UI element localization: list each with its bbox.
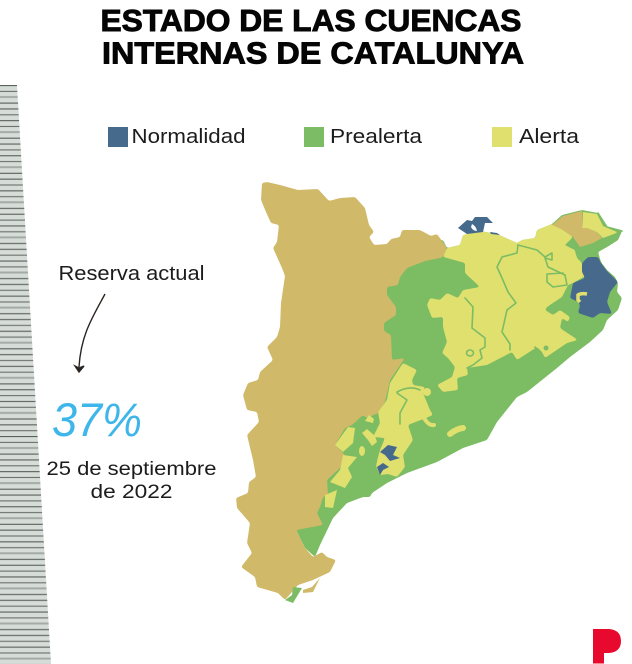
date	[46, 458, 216, 503]
big number 37%: 37%	[52, 393, 142, 446]
date: de 2022	[90, 481, 172, 503]
region: NE tan	[552, 211, 602, 247]
stacked paper column decoration	[0, 85, 51, 664]
region: tan spit south	[303, 578, 320, 593]
yellow patch in east basin	[578, 294, 587, 302]
region: sin datos tan	[236, 182, 447, 600]
green dot	[544, 346, 548, 350]
region: prealerta base	[296, 210, 622, 557]
region: tiny green south	[285, 587, 302, 603]
title: INTERNAS DE CATALUNYA	[102, 36, 524, 70]
logo P	[593, 629, 621, 664]
legend item: Alerta: Alerta	[519, 126, 580, 148]
alerta patches	[325, 388, 463, 508]
label: Reserva actual: Reserva actual	[58, 263, 204, 285]
region: normalidad sliver north	[490, 232, 500, 235]
title: ESTADO DE LAS CUENCAS	[100, 4, 522, 38]
legend item: Alerta	[492, 126, 580, 148]
region: NE alerta strip	[582, 212, 617, 238]
region: normalidad east	[570, 257, 618, 318]
map of Catalonia basins	[236, 182, 622, 603]
region: alerta north-east interior	[427, 224, 587, 392]
title	[100, 4, 524, 70]
rivers	[397, 213, 622, 424]
legend	[108, 126, 580, 148]
region: normalidad north	[458, 217, 493, 234]
arrow	[75, 294, 105, 372]
region: alerta central coastal	[373, 363, 433, 477]
date: 25 de septiembre	[46, 458, 216, 480]
legend item: Prealerta	[304, 126, 423, 148]
region: NE prealerta	[565, 231, 622, 260]
region: normalidad south	[377, 463, 389, 475]
legend item: Normalidad: Normalidad	[132, 126, 246, 148]
region: normalidad central	[380, 445, 400, 461]
legend item: Prealerta: Prealerta	[330, 126, 423, 148]
